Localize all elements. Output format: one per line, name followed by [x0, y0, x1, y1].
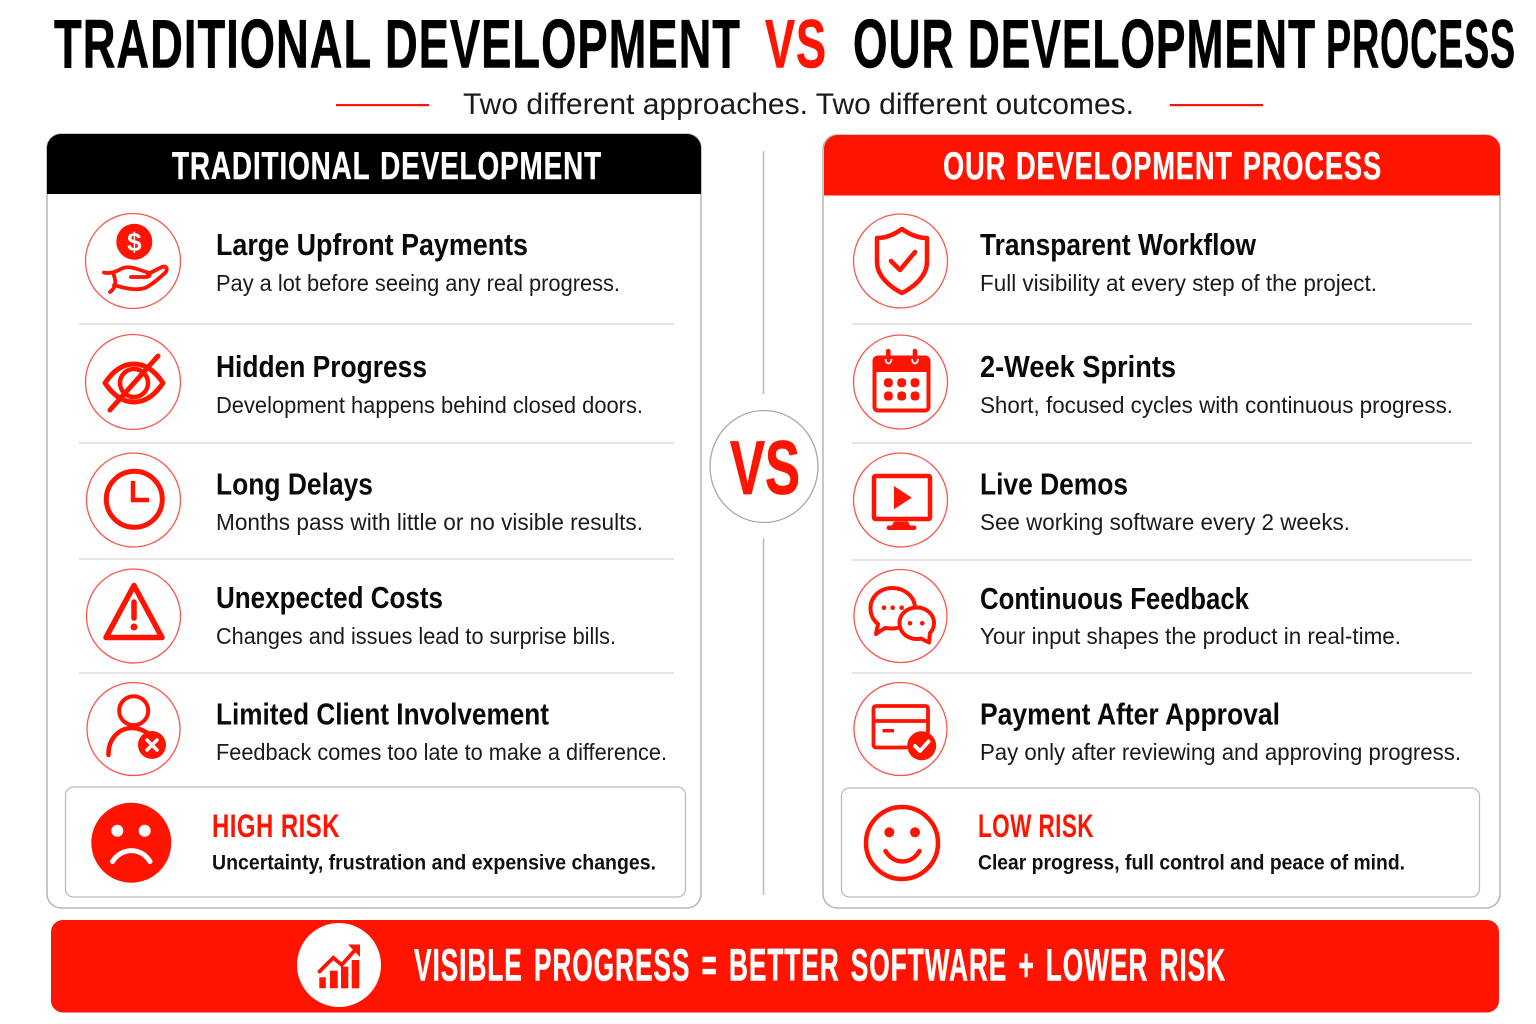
description: Feedback comes too late to make a difference. — [216, 739, 667, 765]
icon: hand with dollar: $ — [127, 227, 142, 257]
icon: crossed eye — [86, 334, 180, 430]
description: Pay a lot before seeing any real progress. — [216, 270, 620, 296]
heading: Payment After Approval — [980, 696, 1280, 732]
title: TRADITIONAL DEVELOPMENT — [54, 6, 741, 82]
heading: Unexpected Costs — [216, 580, 443, 615]
risk description: Uncertainty, frustration and expensive changes. — [212, 852, 656, 874]
heading: Continuous Feedback — [980, 581, 1250, 616]
row: unexpected costs — [86, 569, 616, 663]
heading: Limited Client Involvement — [216, 696, 549, 732]
subtitle: Two different approaches. Two different outcomes. — [463, 88, 1134, 121]
vs divider: VS — [730, 426, 800, 511]
vs divider — [710, 151, 818, 895]
row: 2-week sprints — [854, 335, 1453, 429]
icon: growth chart — [297, 923, 381, 1007]
row: transparent workflow — [854, 214, 1377, 308]
heading: 2-Week Sprints — [980, 349, 1176, 384]
description: Your input shapes the product in real-time. — [980, 623, 1401, 649]
callout: low risk — [842, 788, 1480, 897]
heading: Transparent Workflow — [980, 227, 1257, 262]
description: Development happens behind closed doors. — [216, 392, 643, 418]
panel header: our process — [824, 135, 1500, 196]
icon: shield check — [854, 214, 948, 308]
row: limited client involvement — [87, 682, 667, 776]
callout: high risk — [66, 787, 686, 897]
bottom banner — [51, 920, 1499, 1012]
icon: person with cross — [87, 682, 180, 776]
heading: Long Delays — [216, 466, 373, 502]
risk label: HIGH RISK — [212, 808, 340, 844]
row: live demos — [854, 453, 1350, 547]
icon: clock — [86, 453, 180, 547]
icon: monitor with play — [854, 453, 948, 547]
row: long delays — [86, 453, 643, 547]
risk description: Clear progress, full control and peace of mind. — [978, 852, 1405, 874]
icon: happy face — [866, 807, 938, 879]
description: Changes and issues lead to surprise bills. — [216, 623, 616, 649]
description: Pay only after reviewing and approving progress. — [980, 739, 1461, 765]
panel: traditional development — [47, 134, 701, 908]
description: Full visibility at every step of the project. — [980, 270, 1377, 296]
panel: our development process — [823, 135, 1500, 908]
icon: calendar — [854, 335, 948, 429]
row: payment after approval — [854, 682, 1461, 776]
row: continuous feedback — [854, 570, 1401, 662]
icon: sad face — [91, 803, 171, 883]
risk label: LOW RISK — [978, 808, 1094, 844]
heading: Hidden Progress — [216, 349, 427, 384]
icon: chat bubbles — [854, 570, 947, 662]
description: Months pass with little or no visible results. — [216, 509, 643, 535]
panel header: traditional — [47, 134, 701, 194]
row: hidden progress — [86, 334, 643, 430]
icon: warning triangle — [86, 569, 180, 663]
heading: Large Upfront Payments — [216, 227, 528, 262]
icon: card with check — [854, 682, 947, 776]
panel header: traditional: TRADITIONAL DEVELOPMENT — [172, 145, 602, 188]
row: large upfront payments — [86, 214, 620, 308]
title: VS — [765, 6, 827, 82]
description: See working software every 2 weeks. — [980, 509, 1350, 535]
description: Short, focused cycles with continuous progress. — [980, 392, 1453, 418]
icon: hand with dollar — [86, 214, 180, 308]
heading: Live Demos — [980, 466, 1128, 502]
